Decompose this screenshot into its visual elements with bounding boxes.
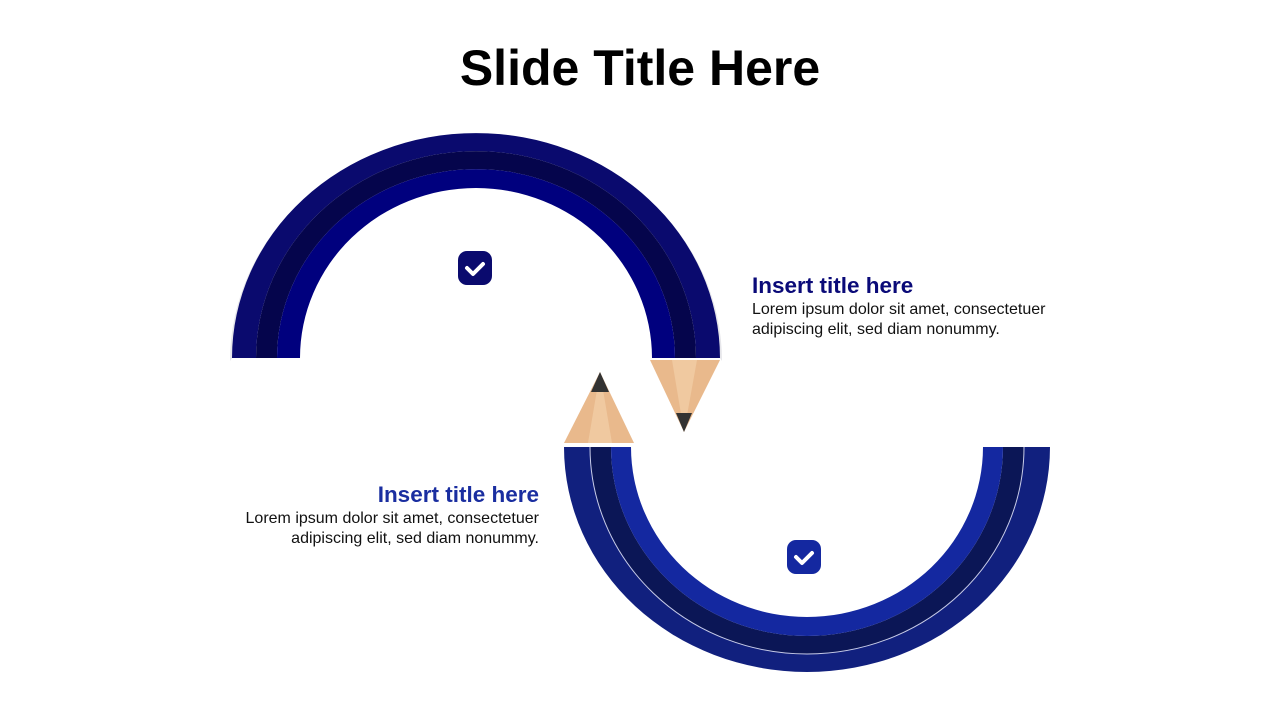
bottom pencil arc — [564, 372, 1050, 672]
pencil tip down — [650, 360, 720, 432]
text block: bottom left: Insert title here — [378, 482, 539, 507]
text block: top right: Lorem ipsum dolor sit amet, consectetuer adipiscing elit, sed diam nonummy. — [752, 301, 1045, 338]
text block: top right — [752, 273, 1046, 338]
text block: top right: Insert title here — [752, 273, 913, 298]
text block: bottom left: Lorem ipsum dolor sit amet, consectetuer adipiscing elit, sed diam nonummy. — [246, 510, 539, 547]
icon: check top — [458, 251, 492, 285]
pencil tip up — [564, 372, 634, 443]
text block: bottom left — [246, 482, 539, 547]
icon: check bottom — [787, 540, 821, 574]
title: Slide Title Here — [460, 40, 820, 96]
top pencil arc — [230, 133, 722, 432]
